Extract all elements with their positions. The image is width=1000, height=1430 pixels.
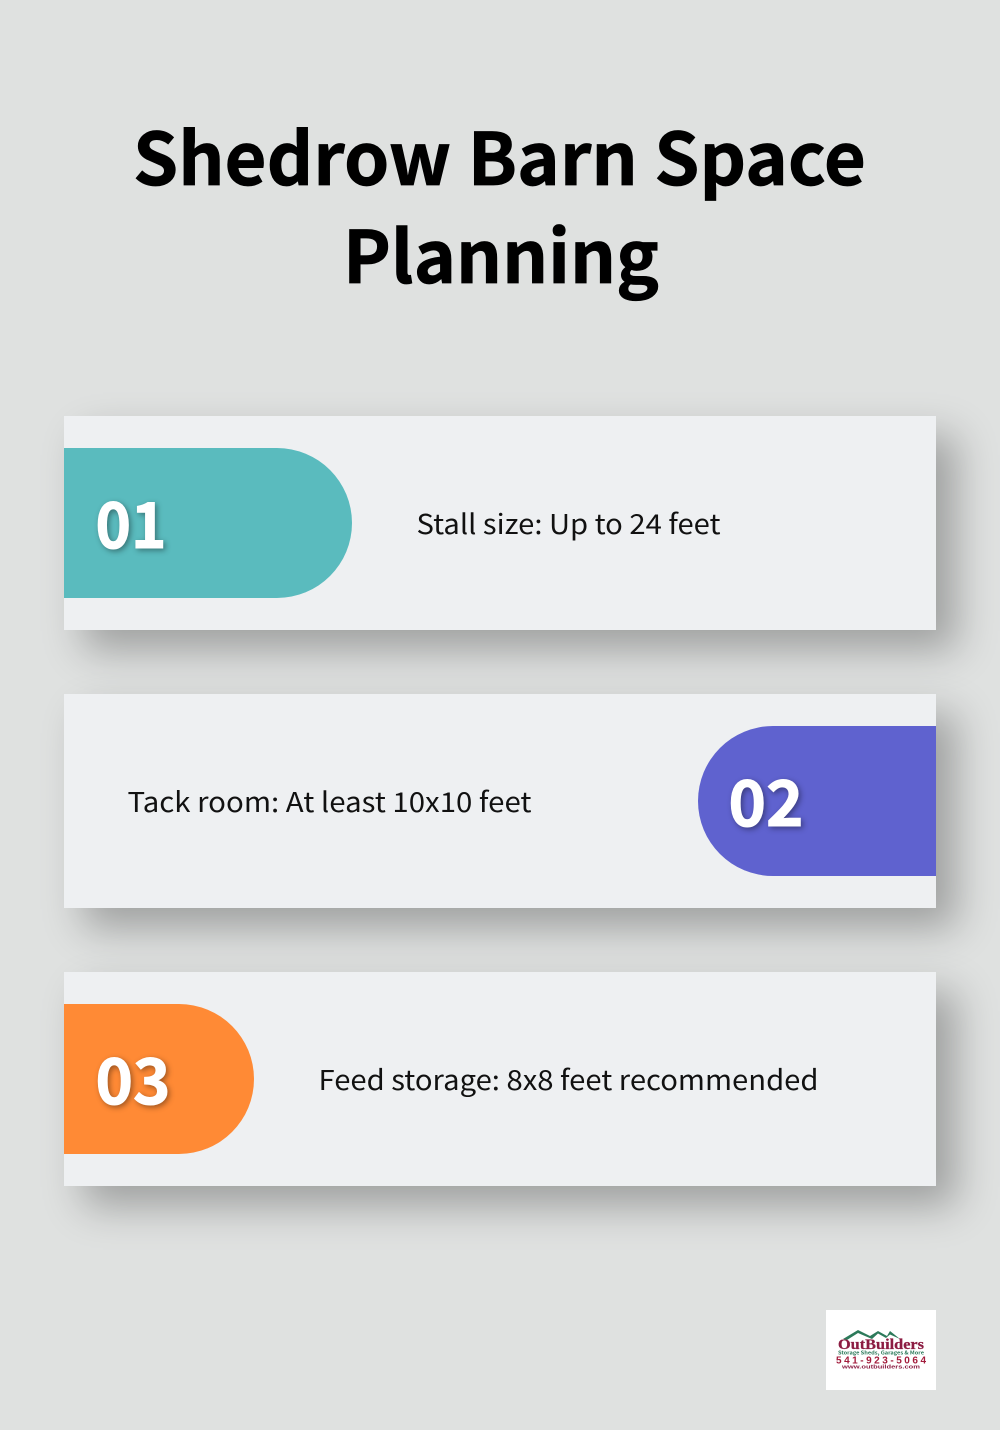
logo: OutBuilders: [826, 1310, 936, 1390]
panel: tack room: [64, 694, 936, 908]
logo: OutBuilders: Storage Sheds, Garages & More: [838, 1350, 924, 1356]
badge: 03: 03: [96, 1032, 170, 1123]
badge: 02: [698, 726, 936, 876]
text: stall size: Stall size: Up to 24 feet: [416, 502, 720, 542]
badge: 02: 02: [728, 754, 804, 845]
badge: 03: [64, 1004, 254, 1154]
text: tack room: Tack room: At least 10x10 feet: [128, 780, 532, 820]
logo: OutBuilders: OutBuilders: [838, 1337, 924, 1353]
badge: 01: 01: [96, 476, 166, 567]
text: feed storage: Feed storage: 8x8 feet recommended: [318, 1058, 818, 1098]
panel: stall size: [64, 416, 936, 630]
title: [133, 101, 866, 304]
logo: OutBuilders: www.outbuilders.com: [841, 1364, 920, 1370]
logo: OutBuilders: 541-923-5064: [836, 1356, 926, 1366]
title: Shedrow Barn Space: [133, 101, 866, 206]
badge: 01: [64, 448, 352, 598]
title: Planning: [343, 199, 659, 304]
panel: feed storage: [64, 972, 936, 1186]
